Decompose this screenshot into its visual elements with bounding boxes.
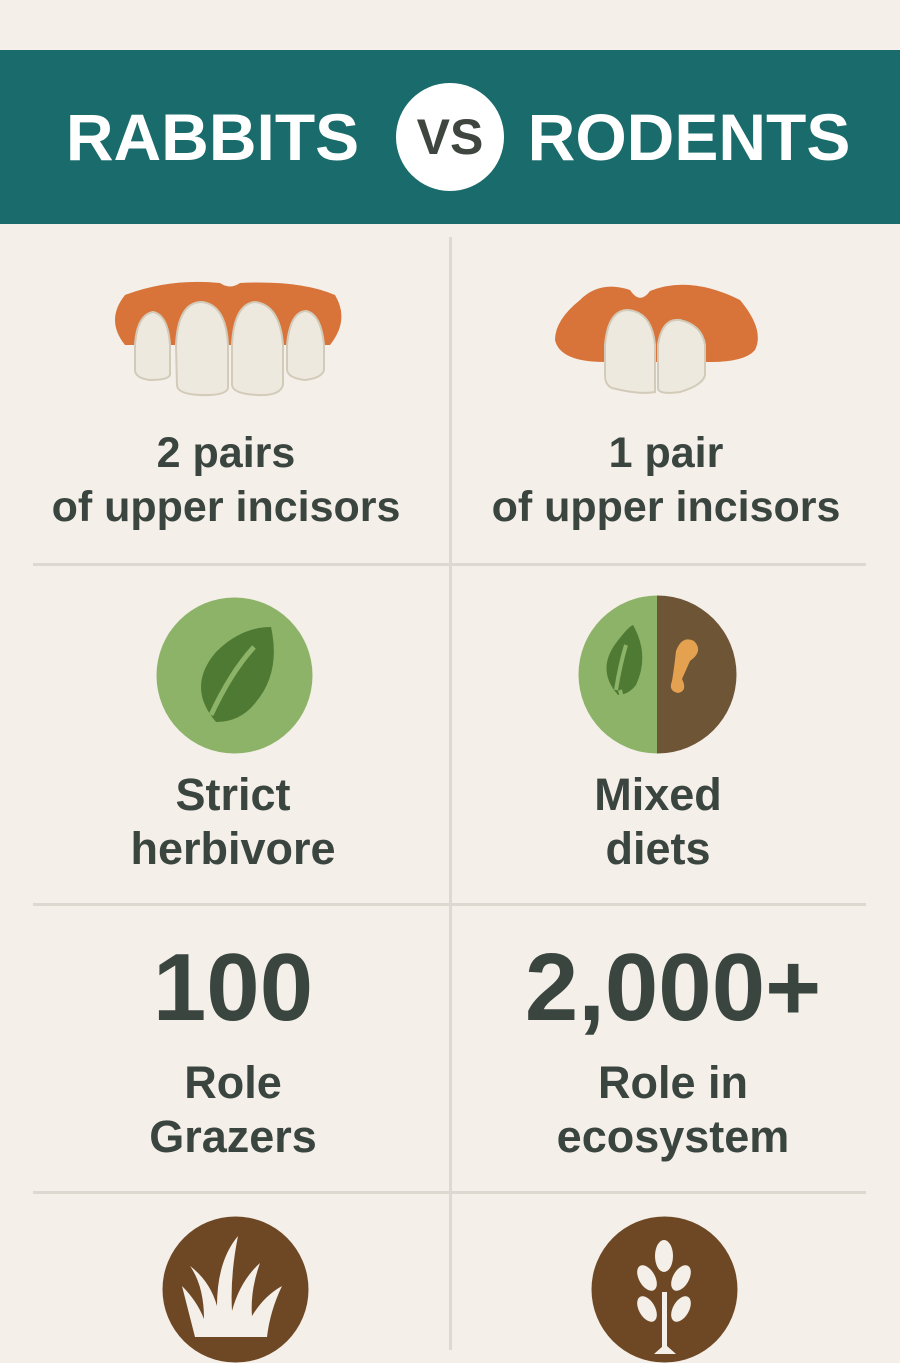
text: strict herbivore: Strict — [175, 769, 291, 820]
stat: 100: 100 — [153, 934, 313, 1041]
text: role grazers — [149, 1057, 317, 1162]
text: mixed diets: diets — [605, 823, 711, 874]
text: strict herbivore: herbivore — [130, 823, 336, 874]
text: mixed diets: Mixed — [594, 769, 722, 820]
text: role in ecosystem: Role in — [598, 1057, 748, 1108]
icon: plant circle — [592, 1216, 738, 1362]
text: 2 pairs: 2 pairs — [157, 429, 295, 477]
vs badge: VS — [417, 109, 483, 165]
text: role in ecosystem: ecosystem — [557, 1111, 789, 1162]
text: role grazers: Grazers — [149, 1111, 317, 1162]
text: role in ecosystem — [557, 1057, 789, 1162]
text: 1 pair — [492, 429, 840, 531]
icon: rabbit teeth — [115, 282, 342, 396]
text: 1 pair: of upper incisors — [492, 483, 840, 531]
text: 1 pair: 1 pair — [609, 429, 723, 477]
icon: leaf circle — [156, 598, 312, 754]
icon: rodent teeth — [555, 284, 758, 394]
text: mixed diets — [594, 769, 722, 874]
title: rodents: RODENTS — [528, 100, 850, 174]
icon: mixed diet circle — [578, 596, 736, 754]
icon: grass circle — [162, 1216, 308, 1362]
header band — [0, 50, 900, 224]
vs badge — [396, 83, 504, 191]
text: role grazers: Role — [184, 1057, 282, 1108]
title: rabbits: RABBITS — [66, 100, 359, 174]
stat: 2,000+: 2,000+ — [525, 934, 821, 1041]
text: 2 pairs — [52, 429, 400, 531]
text: 2 pairs: of upper incisors — [52, 483, 400, 531]
text: strict herbivore — [130, 769, 336, 874]
